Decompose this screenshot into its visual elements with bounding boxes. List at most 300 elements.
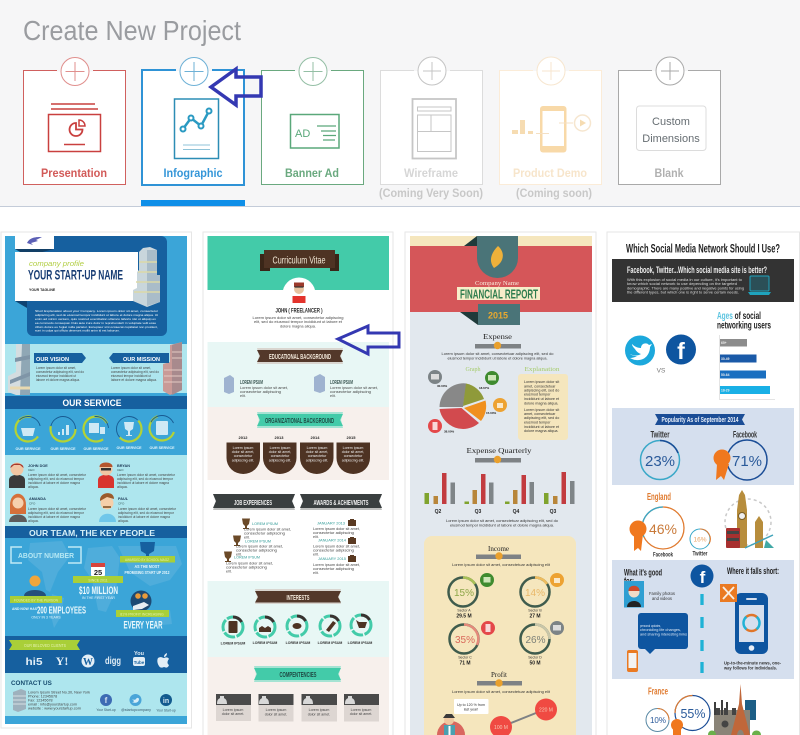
England section: 16% <box>693 536 707 544</box>
pie callouts <box>428 370 507 433</box>
year shields <box>226 442 370 474</box>
calendar icon <box>91 563 105 577</box>
intro text: adipiscing elit, sed do eiusmod tempor incididunt ut labore et dolore magna aliqua. Ut <box>35 313 158 317</box>
explanation box: incididunt ut labore et <box>524 425 559 429</box>
experience and awards section: elit. <box>226 570 232 574</box>
experience and awards section: Lorem ipsum dolor sit amet, <box>313 544 360 548</box>
competencies section <box>208 657 389 735</box>
section: contact: Lorem Ipsum Street No.30, New York <box>28 690 90 694</box>
income heading: Lorem ipsum dolor sit amet, consectetuar adipiscing elit <box>452 563 550 567</box>
explanation box: eiusmod tempor <box>524 420 551 424</box>
section: vision and mission: labore et dolore magna aliqua. <box>111 378 157 382</box>
popularity section: Facebook <box>733 430 757 440</box>
section: contact: @startupcompany <box>121 708 151 712</box>
dashed divider <box>700 594 704 673</box>
card: Banner Ad <box>262 55 364 184</box>
organizational background section: consectetur <box>308 454 327 458</box>
section: vision and mission: Lorem ipsum dolor sit amet, <box>36 366 76 370</box>
France section <box>646 684 761 735</box>
card: Product Demo <box>500 55 602 184</box>
twitter ring <box>640 440 680 480</box>
CV header: elit, sed do eiusmod tempor incididunt ut labore et <box>254 320 343 324</box>
section: our service: OUR SERVICE <box>116 446 142 450</box>
orange X <box>720 584 737 602</box>
explanation box: eiusmod tempor <box>524 392 551 396</box>
section: vision and mission: Lorem ipsum dolor sit amet, <box>111 366 151 370</box>
selected tab bar <box>141 200 245 206</box>
good and short section: What it's good <box>624 568 662 578</box>
section: our service: OUR SERVICE <box>84 447 109 451</box>
plus button <box>299 58 327 86</box>
section: contact: email : info@yourstartup.com <box>28 702 77 706</box>
educational background section: elit. <box>330 394 336 398</box>
speech bubble: last year! <box>464 708 478 712</box>
bar chart: eiusmod tempor incididunt ut labore et dolore magna aliqua. <box>450 524 554 528</box>
interests section: LOREM IPSUM <box>348 641 372 645</box>
organizational background section: consectetur <box>234 454 253 458</box>
calendar icon: 25 <box>94 568 102 577</box>
ribbon: INTERESTS <box>286 593 310 602</box>
client logos: Y! <box>56 654 68 668</box>
awards ribbon: AWARDED BY SCHOOL MAGZ <box>125 558 170 562</box>
product demo icon <box>512 106 590 152</box>
experience and awards section: JANUARY 2015 <box>318 556 347 561</box>
profit ribbon <box>116 610 169 617</box>
CV header: JOHN ( FREELANCER ) <box>276 308 322 314</box>
experience and awards section: JANUARY 2014 <box>318 538 347 542</box>
plus button <box>180 58 208 86</box>
organizational background section: dolor sit amet, <box>306 450 328 454</box>
label: Banner Ad <box>285 168 339 180</box>
section: team members: Lorem ipsum dolor sit amet, consectetur <box>28 507 87 511</box>
organizational background section: Lorem ipsum <box>270 446 290 450</box>
explanation box <box>518 367 568 440</box>
custom dimensions button: Custom <box>652 116 690 128</box>
section: team members: BRYAN <box>117 464 130 468</box>
logo <box>27 237 42 245</box>
title ribbon: Curriculum Vitae <box>272 254 326 266</box>
section: key people numbers <box>5 526 187 636</box>
wireframe icon <box>412 99 456 158</box>
note: coming very soon: (Coming Very Soon) <box>379 188 483 200</box>
section: team members <box>5 455 187 526</box>
interests section: LOREM IPSUM <box>318 641 342 645</box>
dark intro box: demographic. There are many positive and negative points for using <box>627 286 744 290</box>
ribbon <box>655 414 745 425</box>
experience and awards section: elit. <box>313 571 319 575</box>
section: contact: website : www.yourstartup.com <box>28 706 81 710</box>
clients ribbon: OUR BELOVED CLIENTS <box>24 643 66 648</box>
card: Infographic (selected) <box>142 55 244 185</box>
twitter vs facebook icons: VS <box>657 368 666 374</box>
presentation icon <box>48 104 100 152</box>
bar chart: Lorem ipsum dolor sit amet, consectetuar adipiscing elit, sed do <box>446 519 558 523</box>
plus button <box>537 57 565 85</box>
intro text: cillum dolore eu fugiat nulla pariatur. Excepteur sint occaecat cupidatat non proident, <box>35 325 158 329</box>
organizational background section: dolor sit amet, <box>342 450 364 454</box>
arrow: points to Infographic plus button <box>211 69 261 105</box>
about number frame: ABOUT NUMBER <box>18 553 74 560</box>
section: vision and mission: consectetur adipiscing elit, sed do <box>36 370 84 374</box>
panel: financial report infographic <box>405 232 596 735</box>
panel: social media infographic <box>607 232 800 735</box>
card: Presentation <box>24 55 126 184</box>
section: vision and mission: labore et dolore magna aliqua. <box>36 378 80 382</box>
building <box>133 247 160 307</box>
service rings <box>16 416 174 442</box>
section: key people numbers: OUR TEAM, THE KEY PEOPLE <box>29 528 155 538</box>
bar chart: Q4 <box>513 509 520 515</box>
profit bubbles: 220 M <box>539 708 553 714</box>
pie chart: 15.00% <box>486 411 497 415</box>
competency cards: dolor sit amet. <box>350 712 372 716</box>
explanation box: amet, consectetuar <box>524 412 556 416</box>
financial header <box>410 236 592 325</box>
label: Wireframe <box>404 168 458 180</box>
social icons: f <box>105 696 108 705</box>
panel: curriculum vitae infographic <box>203 232 393 735</box>
income rings <box>448 578 550 654</box>
income heading <box>452 545 550 567</box>
explanation box: Lorem ipsum dolor sit <box>524 408 559 412</box>
age bar chart: 18-29 <box>721 388 730 392</box>
avatar: Bryan <box>98 462 114 488</box>
intro text <box>35 309 158 332</box>
plus button <box>656 57 684 85</box>
ribbon <box>255 589 341 604</box>
client logos: You <box>134 651 144 657</box>
competency cards: Lorem ipsum <box>266 708 286 712</box>
awards ribbon <box>120 556 175 562</box>
building <box>8 344 30 395</box>
section: vision and mission: eiusmod tempor incididunt ut <box>36 374 76 378</box>
income and profit box: Sector B <box>528 608 542 612</box>
income and profit box: 71 M <box>459 660 471 666</box>
facebook ring <box>675 696 710 730</box>
explanation box: incididunt ut labore et <box>524 397 559 401</box>
expense heading: Expense <box>483 332 513 341</box>
expense heading <box>442 332 554 360</box>
medal <box>671 719 683 735</box>
twitter vs facebook icons <box>625 334 696 374</box>
section: contact: Your Start-up <box>156 708 176 712</box>
ribbon: job experiences: JOB EXPERIENCES <box>234 498 272 507</box>
experience and awards section: consectetur adipiscing <box>236 548 277 552</box>
experience and awards section: elit. <box>236 552 242 556</box>
social icons: in <box>163 698 169 705</box>
title: Create New Project <box>23 15 241 46</box>
experience and awards section: elit. <box>313 535 319 539</box>
section: team members: Lorem ipsum dolor sit amet, consectetur <box>118 507 177 511</box>
section: contact: Fax: 12345678 <box>28 698 53 702</box>
organizational background section: adipiscing elit. <box>232 458 254 462</box>
presenter <box>437 714 465 735</box>
experience and awards section: LOREM IPSUM <box>245 538 271 544</box>
laptop icon <box>748 276 771 295</box>
organizational background section: adipiscing elit. <box>306 458 328 462</box>
panel: start-up infographic <box>1 232 192 728</box>
age bar chart: Ages of social <box>717 310 761 322</box>
profit heading: Lorem ipsum dolor sit amet, consectetuar adipiscing elit <box>452 690 550 694</box>
pie chart: 30.00% <box>437 384 448 388</box>
callout: chronicling life changes, <box>640 628 681 632</box>
experience and awards section <box>213 494 382 575</box>
coin hand icon <box>130 590 152 612</box>
label: Infographic <box>164 168 223 180</box>
blue phone <box>735 593 768 654</box>
client logos: hi5 <box>26 657 43 668</box>
age bar chart: 30-49 <box>721 357 730 361</box>
section: contact: Phone: 12345678 <box>28 694 57 698</box>
ribbon <box>34 353 86 363</box>
speech bubble: Up to 120 % from <box>457 703 485 707</box>
popularity section <box>612 408 794 485</box>
organizational background section: consectetur <box>271 454 290 458</box>
explanation box: amet, consectetuar <box>524 384 556 388</box>
good and short section <box>612 560 794 679</box>
world map <box>28 541 182 628</box>
experience and awards section: Lorem ipsum dolor sit amet, <box>226 562 273 566</box>
experience and awards section: LOREM IPSUM <box>234 554 260 560</box>
medal <box>714 450 730 480</box>
age bar chart <box>717 310 775 400</box>
experience and awards section: consectetur adipiscing <box>226 566 267 570</box>
card: Wireframe <box>380 55 482 184</box>
twitter ring <box>646 708 669 732</box>
founded ribbon <box>10 596 62 603</box>
section: key people numbers: AND NOW HAS <box>12 607 38 611</box>
educational background section: consectetur adipiscing <box>330 390 371 394</box>
bar chart <box>424 472 574 528</box>
England section: England <box>647 491 671 503</box>
person icon <box>24 576 46 596</box>
explanation box: Lorem ipsum dolor sit <box>524 380 559 384</box>
competency cards: Lorem ipsum <box>309 708 329 712</box>
CV header: dolore magna aliqua. <box>280 324 316 328</box>
client logos <box>26 651 169 668</box>
section: team members: adipiscing elit, sed do eiusmod tempor <box>117 477 174 481</box>
facebook badge: f <box>700 568 706 587</box>
twitter vs facebook icons: f <box>677 338 685 364</box>
organizational background section: 2014 <box>311 435 320 440</box>
income and profit box: Sector C <box>458 656 472 660</box>
section: team members: Lorem ipsum dolor sit amet, consectetur <box>117 473 176 477</box>
flame logo <box>491 246 503 268</box>
intro text: sunt in culpa qui officia deserunt mollit anim id est laborum. <box>35 328 120 332</box>
Paris landmarks <box>708 684 761 735</box>
experience and awards section: elit. <box>244 536 250 540</box>
section: our service <box>5 396 187 455</box>
organizational background section: 2012 <box>239 435 248 440</box>
organizational background section: 2015 <box>347 435 356 440</box>
dark intro box: know which social network to use depending on the targeted <box>627 282 737 286</box>
educational background section: LOREM IPSUM <box>330 380 353 386</box>
income and profit box: Sector D <box>528 656 542 660</box>
pie chart: 18.67% <box>479 386 490 390</box>
explanation box: adipiscing elit, sed do <box>524 416 559 420</box>
ribbon: OUR VISION <box>36 357 69 363</box>
section: contact: CONTACT US <box>11 680 52 687</box>
intro text: ea commodo consequat. Duis aute irure dolor in reprehenderit in voluptate velit esse <box>35 321 156 325</box>
section: key people numbers: IN THE FIRST YEAR <box>82 596 115 600</box>
income heading: Income <box>488 545 509 553</box>
competency cards <box>216 694 379 722</box>
ribbon: ORGANIZATIONAL BACKGROUND <box>265 416 334 425</box>
section: team members: CFO <box>118 502 125 506</box>
competency cards: dolor sit amet. <box>308 712 330 716</box>
explanation box: dolore magna aliqua. <box>524 402 558 406</box>
age bar chart: 65+ <box>721 341 727 345</box>
label: Blank <box>654 168 684 180</box>
experience and awards section: consectetur adipiscing <box>313 548 354 552</box>
ribbon: awards <box>300 494 382 510</box>
section: vision and mission: eiusmod tempor incididunt ut <box>111 374 151 378</box>
explanation box: Explanation <box>524 367 560 373</box>
hero section <box>5 236 187 344</box>
England section: Twitter <box>692 550 708 558</box>
custom dimensions button <box>636 106 706 150</box>
experience and awards section: elit. <box>313 552 319 556</box>
section: team members: incididunt ut labore et dolore magna <box>117 481 170 485</box>
section: key people numbers: EVERY YEAR <box>124 620 163 632</box>
profit heading: Profit <box>491 671 507 679</box>
experience and awards section: LOREM IPSUM <box>252 521 278 526</box>
facebook ring <box>642 507 684 549</box>
building <box>13 689 26 712</box>
section: our service: OUR SERVICE <box>150 446 175 450</box>
organizational background section <box>208 407 389 480</box>
speech bubble <box>454 699 488 714</box>
label: Product Demo <box>513 168 587 180</box>
founded ribbon: FOUNDED BY THE PERSON <box>14 598 58 602</box>
header band <box>0 0 800 207</box>
profit heading <box>452 671 550 694</box>
competency cards: dolor sit amet. <box>222 712 244 716</box>
section: team members: aliqua. <box>28 519 39 523</box>
experience and awards section: Lorem ipsum dolor sit amet, <box>313 527 360 531</box>
section: team members: incididunt ut labore et dolore magna <box>118 515 171 519</box>
expense heading: eiusmod tempor incididunt ut labore et dolore magna aliqua. <box>448 356 548 360</box>
avatar: John <box>9 462 25 488</box>
bar chart: Q3 <box>475 509 482 515</box>
section: key people numbers: AS THE MOST <box>134 564 160 569</box>
avatar: Paul <box>99 493 116 522</box>
trophy icon <box>140 542 155 560</box>
social icons <box>100 694 172 706</box>
label: Presentation <box>41 168 107 180</box>
competency cards: Lorem ipsum <box>351 708 371 712</box>
intro text: enim ad minim veniam, quis nostrud exercitation ullamco laboris nisi ut aliquip ex <box>35 317 157 321</box>
since ribbon <box>73 576 123 583</box>
profit line <box>501 709 546 727</box>
educational background section: Lorem ipsum dolor sit amet, <box>240 386 288 390</box>
profit ribbon: 81% PROFIT INCREASING <box>120 612 164 616</box>
England section <box>630 490 774 558</box>
client logos: Tube <box>134 660 145 665</box>
financial header: FINANCIAL REPORT <box>460 286 538 302</box>
experience and awards section: Lorem ipsum dolor sit amet, <box>313 563 360 567</box>
good and short section: Family photos <box>649 591 675 596</box>
intro text: Short Explanation about your Company. Lorem ipsum dolor sit amet, consectetur <box>35 309 158 313</box>
London landmarks <box>725 490 774 548</box>
organizational background section: adipiscing elit. <box>269 458 291 462</box>
briefcases <box>348 519 356 562</box>
section: team members: PAUL <box>118 497 129 501</box>
pie chart: Graph <box>466 367 480 373</box>
popularity section: 71% <box>732 453 762 470</box>
section: team members: CEO <box>117 468 124 472</box>
service icons <box>21 421 168 436</box>
custom dimensions button: Dimensions <box>642 133 700 145</box>
good and short section: way follows for individuals. <box>723 666 777 670</box>
hero section: YOUR TAGLINE <box>29 288 56 292</box>
organizational background section: Lorem ipsum <box>307 446 327 450</box>
hero section: company profile <box>29 261 84 268</box>
plus button <box>61 58 89 86</box>
section: team members: aliqua. <box>117 485 128 489</box>
interests section: LOREM IPSUM <box>221 642 245 646</box>
about number frame <box>11 547 81 563</box>
ribbon: EDUCATIONAL BACKGROUND <box>269 352 331 361</box>
financial header: Company Name <box>475 281 519 287</box>
educational background section: Lorem ipsum dolor sit amet, <box>330 386 378 390</box>
experience and awards section: consectetur adipiscing <box>313 567 354 571</box>
avatar: Amanda <box>9 494 27 522</box>
financial header: 2015 <box>488 310 508 320</box>
experience and awards section: JANUARY 2013 <box>317 520 346 526</box>
CV header <box>208 236 389 328</box>
good and short section: Up-to-the-minute news, one- <box>724 660 782 666</box>
section: vision and mission: consectetur adipiscing elit, sed do <box>111 370 159 374</box>
income and profit box: 29.5 M <box>456 614 472 620</box>
building <box>314 374 325 393</box>
CV header: Lorem ipsum dolor sit amet, consectetur adipiscing <box>252 316 344 320</box>
England section: Facebook <box>653 552 673 558</box>
client logos: W <box>83 657 93 668</box>
pie chart <box>428 367 507 434</box>
income and profit box: 27 M <box>529 614 541 620</box>
hero section: YOUR START-UP NAME <box>28 266 123 282</box>
organizational background section: dolor sit amet, <box>269 450 291 454</box>
arrow: points to curriculum vitae template <box>338 326 399 354</box>
competency cards: Lorem ipsum <box>223 708 243 712</box>
dark intro box: With this explosion of social media in our culture, it's important to <box>627 278 742 282</box>
facebook ring <box>727 440 767 480</box>
income and profit box: 26% <box>525 635 546 646</box>
dark intro box: the different types, but which one is right to serve certain needs. <box>627 290 739 294</box>
interests section: LOREM IPSUM <box>253 641 277 645</box>
section: contact: Your Start-up <box>96 708 116 712</box>
twitter ring <box>690 529 710 549</box>
clients ribbon <box>9 640 80 650</box>
popularity section: Twitter <box>650 430 670 440</box>
section: team members: incididunt ut labore et dolore magna <box>28 481 81 485</box>
plus button <box>418 57 446 85</box>
bar chart: Q3 <box>550 509 557 515</box>
section: our service: OUR SERVICE <box>62 398 122 408</box>
good and short section: and videos <box>652 596 672 601</box>
section: team members: Lorem ipsum dolor sit amet, consectetur <box>28 473 87 477</box>
infographic icon <box>174 99 218 158</box>
experience and awards section: Lorem ipsum dolor sit amet, <box>236 544 283 548</box>
income and profit box: 14% <box>525 588 545 599</box>
callout: and sharing interesting links <box>640 632 687 636</box>
note: coming soon: (Coming soon) <box>516 188 592 200</box>
section: key people numbers: $10 MILLION <box>79 585 118 597</box>
avatar <box>292 282 306 303</box>
income icons <box>480 573 564 635</box>
popularity section: 23% <box>645 453 675 470</box>
